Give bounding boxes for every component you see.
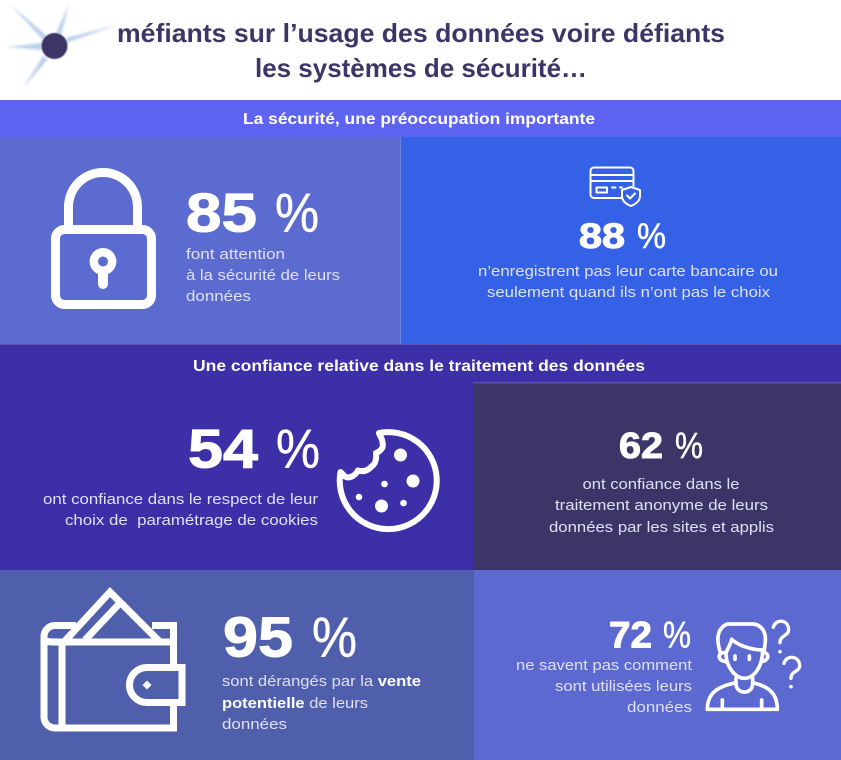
description: 62 %: données par les sites et applis: [549, 519, 774, 536]
description: 72 %: données: [627, 699, 692, 716]
stat: 88 %: %: [637, 217, 666, 256]
stat: 85 %: [186, 182, 319, 244]
icon: star burst: [7, 4, 116, 88]
description: 72 %: ne savent pas comment: [516, 657, 693, 674]
stat: 95 %: %: [312, 606, 357, 670]
panel: 62 %: [473, 382, 841, 570]
stat: 54 %: [188, 418, 320, 480]
description: 88 %: seulement quand ils n’ont pas le choix: [487, 284, 771, 301]
stat: 88 %: [579, 217, 666, 256]
description: 85 %: données: [186, 288, 251, 305]
description: 88 %: n’enregistrent pas leur carte bancaire ou: [478, 263, 778, 280]
stat: 72 %: [609, 614, 691, 656]
description: 85 %: [186, 246, 340, 305]
stat: 95 %: 95: [223, 606, 293, 670]
stat: 54 %: 54: [188, 418, 258, 480]
description: 95 %: potentielle de leurs: [222, 695, 368, 712]
stat: 85 %: %: [275, 182, 319, 244]
stat: 72 %: %: [663, 614, 691, 656]
description: 62 %: [549, 476, 774, 536]
panel: confiance, 54 %: [0, 344, 841, 570]
description: 62 %: ont confiance dans le: [582, 476, 740, 493]
description: 54 %: ont confiance dans le respect de leur: [43, 491, 318, 508]
description: 54 %: choix de paramétrage de cookies: [65, 512, 318, 529]
stat: 62 %: [619, 425, 703, 466]
panel: 85 %: [0, 137, 400, 344]
icon: wallet: [44, 592, 182, 728]
stat: 95 %: [223, 606, 357, 670]
description: 95 %: sont dérangés par la vente: [222, 673, 421, 690]
icon: padlock: [56, 172, 152, 304]
description: 95 %: données: [222, 716, 287, 733]
description: 85 %: font attention: [186, 246, 285, 263]
icon: person with question marks: [707, 621, 800, 709]
stat: 85 %: 85: [186, 182, 257, 244]
icon: bank card with shield: [590, 168, 640, 206]
description: 72 %: sont utilisées leurs: [555, 678, 692, 695]
title: les systèmes de sécurité…: [255, 53, 587, 83]
description: 54 %: [43, 491, 318, 529]
section heading: sécurité: La sécurité, une préoccupation importante: [243, 111, 595, 128]
section heading: sécurité: [0, 100, 841, 137]
section heading: confiance: Une confiance relative dans le traitement des données: [193, 358, 645, 375]
stat: 62 %: 62: [619, 425, 663, 466]
stat: 72 %: 72: [609, 614, 652, 656]
panel: 72 %: [474, 570, 841, 760]
description: 72 %: [516, 657, 693, 716]
description: 88 %: [478, 263, 778, 301]
icon: cookie: [340, 432, 437, 529]
stat: 62 %: %: [675, 425, 703, 466]
title: méfiants sur l’usage des données voire défiants: [117, 18, 725, 48]
stat: 54 %: %: [276, 418, 320, 480]
stat: 88 %: 88: [579, 217, 625, 256]
description: 85 %: à la sécurité de leurs: [186, 267, 340, 284]
description: 62 %: traitement anonyme de leurs: [555, 497, 768, 514]
panel: 95 %: [0, 570, 474, 760]
description: 95 %: [222, 673, 421, 733]
panel: 88 %: [400, 137, 841, 344]
title: [117, 18, 725, 83]
